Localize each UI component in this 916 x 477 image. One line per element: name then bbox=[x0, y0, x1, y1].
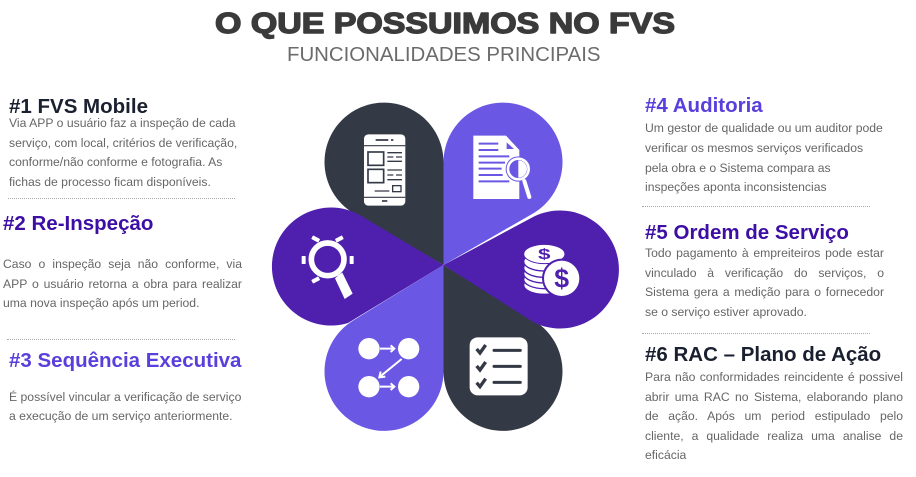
text: #6 description bbox=[645, 370, 903, 462]
text: #2 description: APP o usuário retorna a obra para realizar bbox=[3, 277, 242, 291]
panel: #5 Ordem de Serviço bbox=[645, 221, 884, 319]
text: #6 description: eficácia bbox=[645, 448, 686, 462]
text: #4 description: pela obra e o Sistema compara as bbox=[645, 161, 831, 175]
icon: coin stack with dollar: $ bbox=[538, 247, 551, 263]
text: #5 description: se o serviço estiver aprovado. bbox=[645, 305, 807, 319]
panel: #1 FVS Mobile bbox=[9, 95, 237, 189]
text: #4 description: inspeções aponta inconsistencias bbox=[645, 180, 827, 194]
text: #1 description: Via APP o usuário faz a inspeção de cada bbox=[9, 116, 236, 130]
text: #6 description: abrir uma RAC no Sistema, elaborando plano bbox=[645, 390, 903, 404]
text: #2 description bbox=[3, 257, 242, 310]
text: #5 description: vinculado à verificação do serviços, o bbox=[645, 266, 884, 280]
text: #3 description bbox=[9, 390, 241, 423]
icon: magnifier with ticks bbox=[302, 235, 354, 299]
text: #6 description: cliente, a qualidade realiza uma analise de bbox=[645, 429, 903, 443]
heading: #1: #1 FVS Mobile bbox=[9, 95, 148, 118]
text: #4 description: verificar os mesmos serviços verificados bbox=[645, 141, 863, 155]
icon: coin stack with dollar: $ bbox=[554, 264, 569, 294]
icon: mobile phone bbox=[364, 134, 405, 206]
panel: #3 Sequência Executiva bbox=[9, 349, 242, 423]
petal: top right light bbox=[444, 103, 562, 265]
text: #1 description: fichas de processo ficam disponíveis. bbox=[9, 175, 211, 189]
text: #6 description: Para não conformidades reincidente é possivel bbox=[645, 370, 903, 384]
heading: #3: #3 Sequência Executiva bbox=[9, 349, 241, 372]
heading: #6: #6 RAC – Plano de Ação bbox=[645, 343, 881, 366]
title: O QUE POSSUIMOS NO FVS bbox=[215, 8, 675, 40]
text: #6 description: de ação. Após um period estipulado pelo bbox=[645, 409, 903, 423]
text: #3 description: a execução de um serviço anteriormente. bbox=[9, 409, 233, 423]
petal: top left dark bbox=[325, 103, 444, 265]
text: #2 description: Caso o inspeção seja não conforme, via bbox=[3, 257, 242, 271]
heading: #2: #2 Re-Inspeção bbox=[3, 212, 153, 235]
petal: bottom left light bbox=[325, 265, 444, 431]
text: #5 description: Sistema gera a medição para o fornecedor bbox=[645, 285, 884, 299]
text: #1 description: serviço, com local, critérios de verificação, bbox=[9, 136, 237, 150]
text: #1 description bbox=[9, 116, 237, 189]
icon: document with magnifier bbox=[473, 136, 531, 199]
panel: #2 Re-Inspeção bbox=[3, 212, 242, 310]
text: #4 description: Um gestor de qualidade ou um auditor pode bbox=[645, 121, 883, 135]
icon: coin stack with dollar bbox=[524, 244, 581, 298]
text: #1 description: conforme/não conforme e fotografia. As bbox=[9, 155, 222, 169]
panel: #6 RAC – Plano de Ação bbox=[645, 343, 903, 462]
subtitle: FUNCIONALIDADES PRINCIPAIS bbox=[287, 44, 600, 66]
text: #3 description: É possível vincular a verificação de serviço bbox=[9, 390, 241, 404]
text: #5 description: Todo pagamento à empreiteiros pode estar bbox=[645, 246, 884, 260]
text: #5 description bbox=[645, 246, 884, 319]
petal: bottom right dark bbox=[444, 265, 562, 431]
panel: #4 Auditoria bbox=[645, 94, 883, 194]
petal: left deep purple bbox=[272, 208, 444, 326]
text: #2 description: uma nova inspeção após um period. bbox=[3, 296, 199, 310]
heading: #4: #4 Auditoria bbox=[645, 94, 763, 117]
petal: right deep purple bbox=[444, 210, 619, 328]
icon: checklist bbox=[470, 337, 528, 395]
text: #4 description bbox=[645, 121, 883, 194]
icon: sequence flow bbox=[358, 338, 419, 397]
heading: #5: #5 Ordem de Serviço bbox=[645, 221, 849, 244]
